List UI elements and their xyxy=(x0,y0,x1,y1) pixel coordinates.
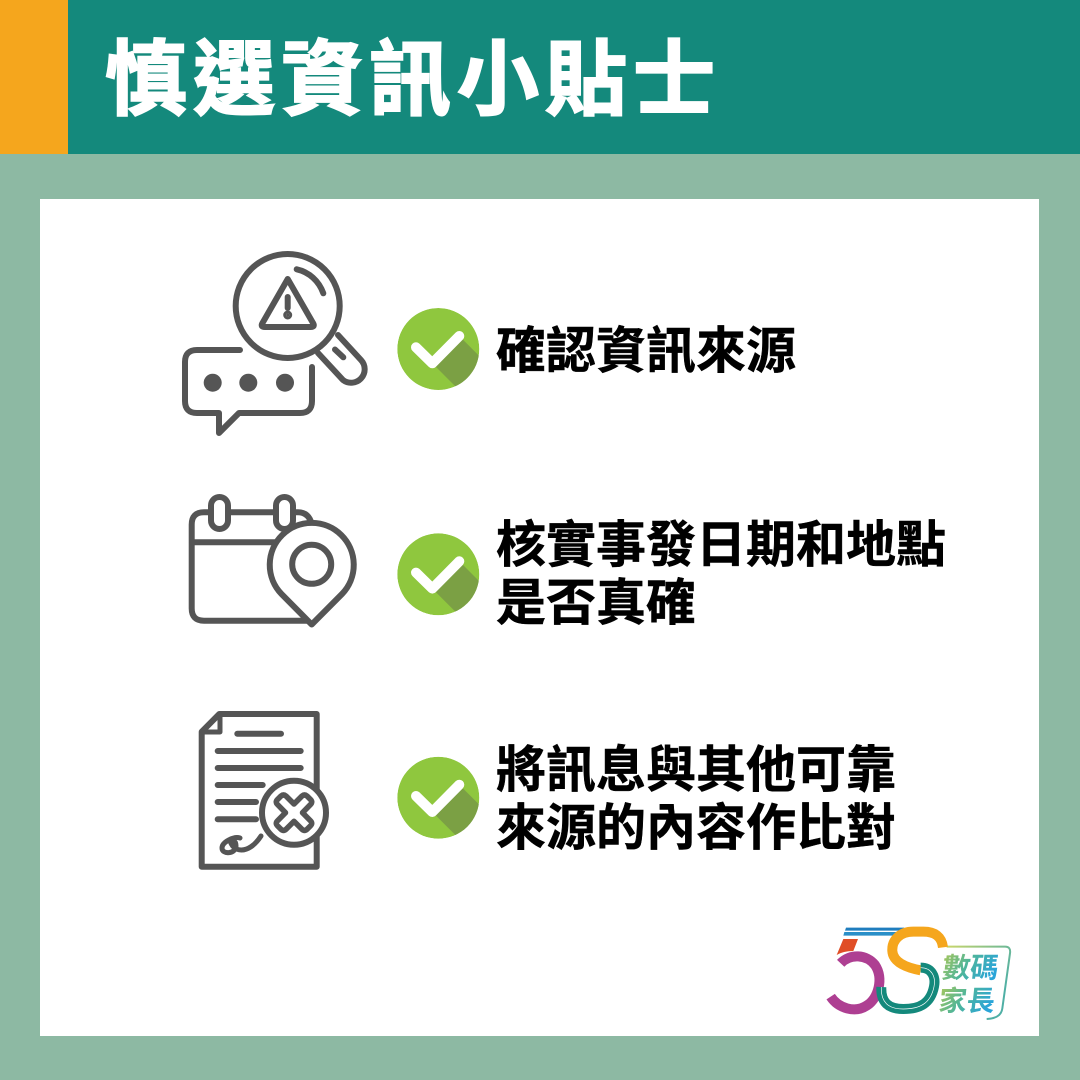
icon: check badge 2 xyxy=(397,533,480,616)
tip 3 text: 將訊息與其他可靠 xyxy=(496,742,896,798)
icon: check badge 3 xyxy=(397,756,480,839)
tip 1 text: 確認資訊來源 xyxy=(496,323,796,379)
tip 2 text: 核實事發日期和地點 xyxy=(496,517,946,573)
tip 2 text xyxy=(496,517,946,631)
icon: check badge 1 xyxy=(397,308,480,390)
icon: calendar with location pin xyxy=(192,497,354,624)
tip 3 text xyxy=(496,742,896,856)
white content panel xyxy=(40,199,1039,1036)
icon: document with cross mark xyxy=(202,714,326,867)
title: 慎選資訊小貼士 xyxy=(105,35,721,126)
logo: 55 digital parents xyxy=(831,928,1010,1019)
orange accent block xyxy=(0,0,68,154)
logo: 55 digital parents: 數碼 xyxy=(941,952,1000,983)
icon: magnifier warning and speech bubble xyxy=(185,254,365,433)
tip 3 text: 來源的內容作比對 xyxy=(496,800,896,856)
logo: 55 digital parents: 家長 xyxy=(937,986,997,1017)
tip 2 text: 是否真確 xyxy=(496,575,696,631)
header band xyxy=(0,0,1080,154)
